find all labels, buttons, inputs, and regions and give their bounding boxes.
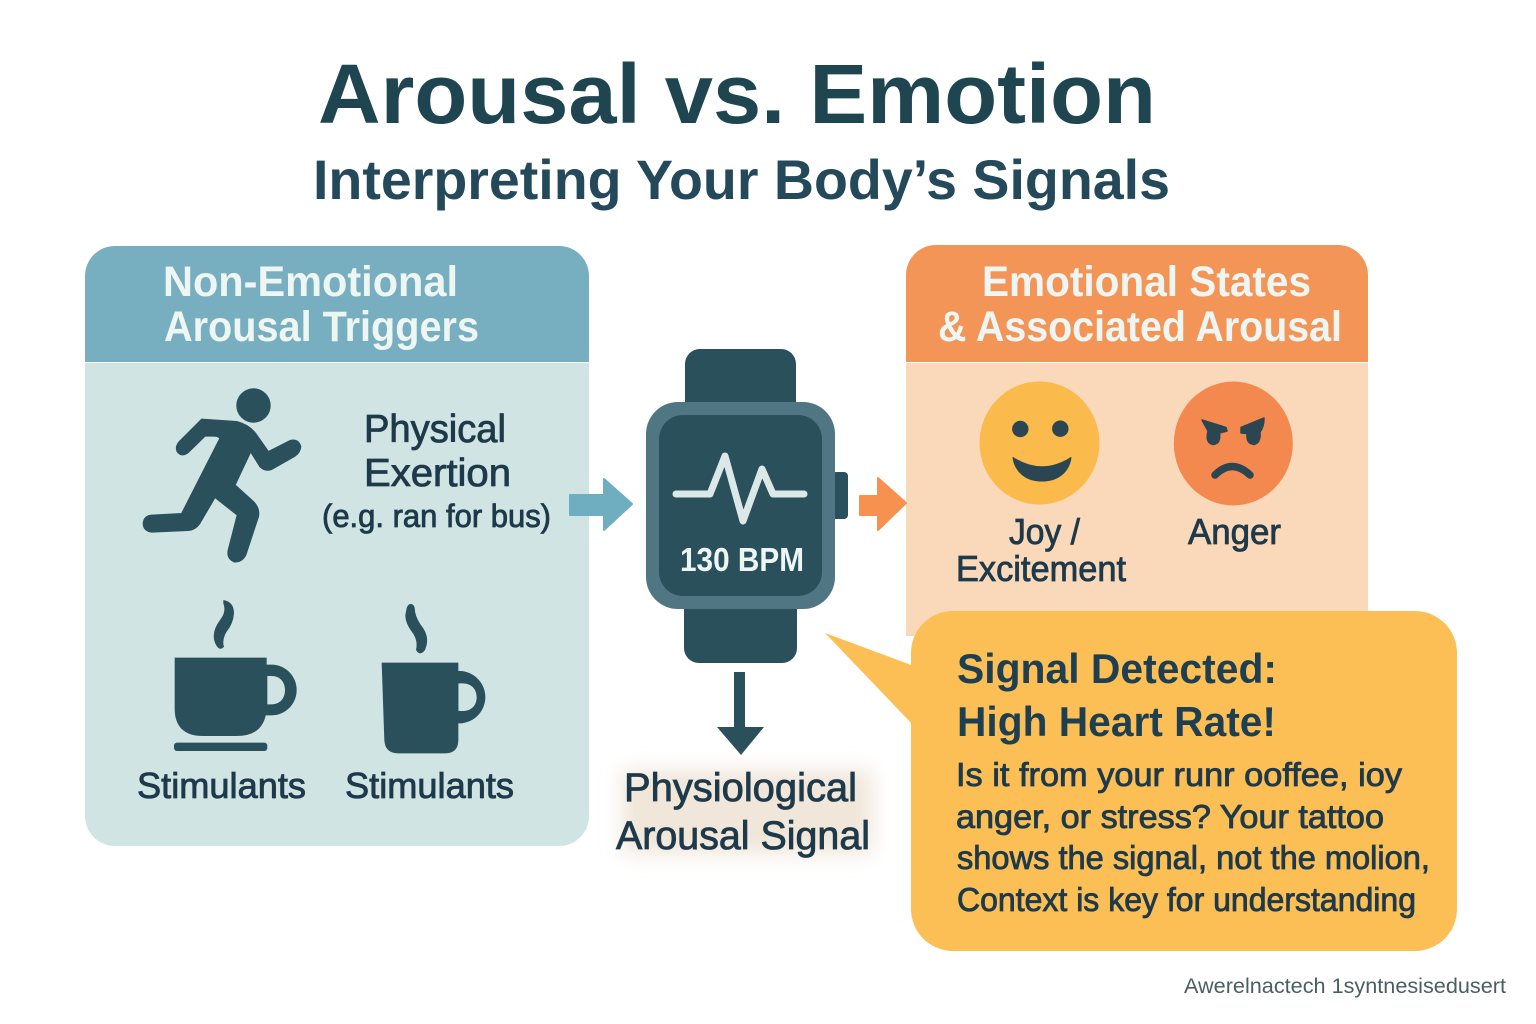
heartbeat line <box>676 456 804 521</box>
physiological arousal signal label: Physiological <box>624 766 857 810</box>
arrow: triggers to watch <box>570 479 632 530</box>
arrow: watch to emotions <box>860 478 906 530</box>
panel heading: non-emotional: Non-Emotional <box>163 258 458 306</box>
icon: coffee mug <box>382 604 485 753</box>
callout: signal detected <box>825 611 1457 951</box>
panel heading: emotional states: Emotional States <box>982 258 1311 306</box>
subtitle: Interpreting Your Body’s Signals <box>313 148 1170 211</box>
callout body text: anger, or stress? Your tattoo <box>956 798 1384 835</box>
callout body text: shows the signal, not the molion, <box>957 839 1430 876</box>
icon: coffee cup with saucer <box>174 600 297 751</box>
callout body text: Is it from your runr ooffee, ioy <box>956 756 1403 793</box>
callout heading: High Heart Rate! <box>957 698 1276 745</box>
panel heading: emotional states <box>938 258 1342 351</box>
anger label: Anger <box>1188 511 1281 552</box>
physical exertion label: Exertion <box>364 452 511 495</box>
icon: smartwatch <box>646 349 848 663</box>
icon: running person <box>143 388 301 562</box>
callout body text: Context is key for understanding <box>957 881 1416 918</box>
joy label: Joy / <box>1009 511 1080 552</box>
arrow: watch to signal label <box>717 672 764 755</box>
stimulants label 2: Stimulants <box>345 765 514 806</box>
physical exertion label <box>322 408 551 534</box>
callout heading <box>957 645 1277 745</box>
physical exertion label: (e.g. ran for bus) <box>322 498 551 534</box>
panel heading: non-emotional <box>163 258 479 351</box>
panel heading: emotional states: & Associated Arousal <box>938 303 1342 351</box>
physiological arousal signal label: Arousal Signal <box>616 814 870 858</box>
icon: anger face <box>1174 382 1293 506</box>
title: Arousal vs. Emotion <box>318 47 1156 141</box>
callout body text <box>956 756 1430 918</box>
joy label: Excitement <box>956 548 1126 589</box>
footer credit: Awerelnactech 1syntnesisedusert <box>1184 975 1506 998</box>
callout heading: Signal Detected: <box>957 645 1277 692</box>
panel: non-emotional arousal triggers <box>85 246 589 846</box>
stimulants label 1: Stimulants <box>137 765 306 806</box>
physiological arousal signal label <box>616 766 872 858</box>
panel: emotional states <box>906 245 1368 636</box>
joy label <box>956 511 1126 589</box>
physical exertion label: Physical <box>364 408 506 451</box>
icon: joy face <box>980 382 1100 504</box>
panel heading: non-emotional: Arousal Triggers <box>164 303 479 351</box>
heart rate reading: 130 BPM <box>680 541 804 578</box>
